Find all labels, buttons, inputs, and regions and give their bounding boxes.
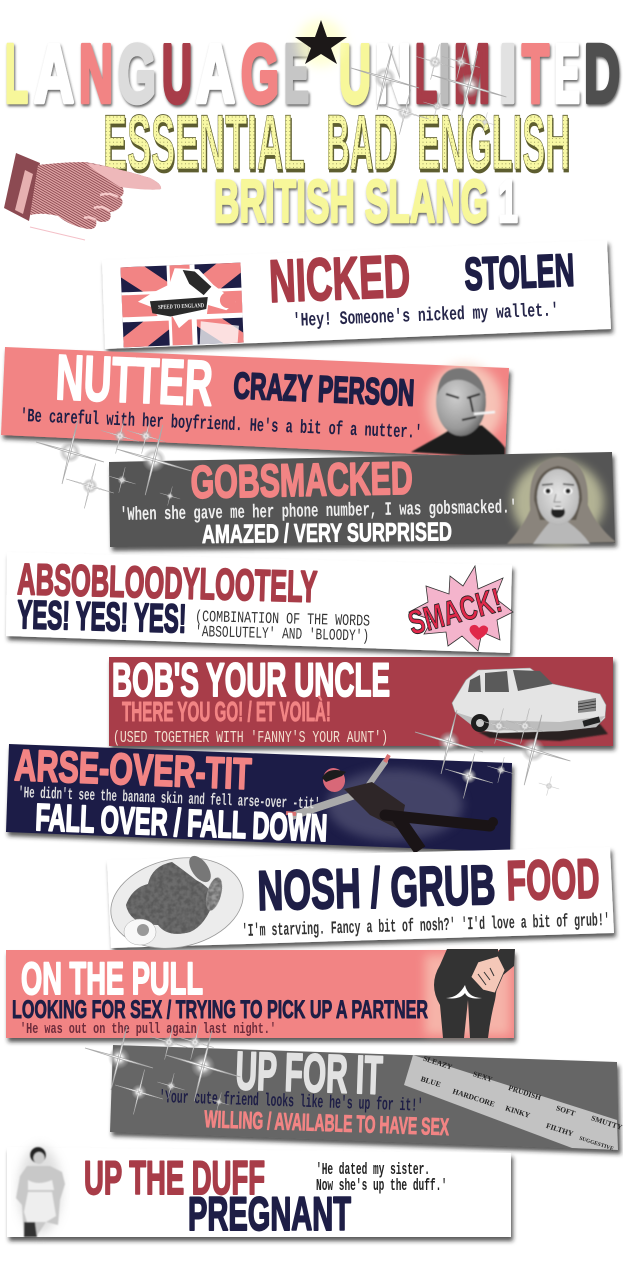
ruler strip of words [404, 1054, 623, 1153]
title: N [79, 27, 113, 120]
meaning: willing: WILLING / AVAILABLE TO HAVE SEX [204, 1106, 450, 1141]
panel: absobloodylootely [6, 552, 513, 653]
meaning: crazy person: CRAZY PERSON [233, 365, 415, 414]
subtitle: essential bad english: ESSENTIAL [103, 98, 305, 186]
title: M [454, 27, 490, 120]
title: E [284, 27, 309, 120]
ruler strip of words: SUGGESTIVE [578, 1136, 615, 1153]
title: T [522, 27, 549, 120]
title: A [196, 27, 235, 120]
sparkles: gobsmacked [36, 418, 191, 508]
title: I [439, 27, 450, 120]
panel: arse-over-tit [6, 741, 512, 852]
heading: arse-over-tit: ARSE-OVER-TIT [14, 741, 252, 799]
ruler strip of words: SOFT [555, 1103, 576, 1118]
title: G [118, 27, 156, 120]
title: G [241, 27, 279, 120]
icon: union flag: SPEED TO ENGLAND [158, 303, 205, 311]
meaning: there you go: THERE YOU GO! / ET VOILÀ! [122, 696, 331, 727]
icon: smack burst: SMACK! [404, 581, 506, 643]
title: E [554, 27, 580, 120]
sparkles: title [351, 44, 506, 134]
meaning: yes yes yes: YES! YES! YES! [17, 593, 187, 641]
ruler strip of words: PRUDISH [507, 1083, 542, 1102]
panel: nutter [1, 341, 509, 458]
photo: falling man [286, 755, 498, 850]
photo: reliant car [452, 668, 608, 741]
icon: union flag [121, 263, 244, 347]
photo: surprised woman [507, 457, 616, 544]
title [5, 27, 620, 120]
ruler strip of words: BLUE [420, 1074, 442, 1089]
note: (USED TOGETHER WITH 'FANNY'S YOUR AUNT') [113, 729, 388, 748]
panel: nosh [102, 846, 614, 960]
heading: nosh / grub: NOSH / GRUB [257, 853, 496, 922]
example sentence: 'He didn't see the banana skin and fell arse-over -tit' [18, 784, 320, 814]
meaning: pregnant: PREGNANT [188, 1187, 351, 1240]
heading: nicked: NICKED [268, 242, 411, 315]
example line two: Now she's up the duff.' [316, 1177, 447, 1196]
example line one: 'He dated my sister. [316, 1161, 430, 1180]
heading: on the pull: ON THE PULL [21, 953, 203, 1004]
icon: pointing hand [4, 153, 161, 240]
heading: up the duff: UP THE DUFF [84, 1151, 265, 1204]
title: A [34, 27, 74, 120]
icon: silhouette with hand [425, 949, 515, 1038]
example sentence: 'He was out on the pull again last night.' [20, 1021, 276, 1038]
meaning: fall over: FALL OVER / FALL DOWN [35, 797, 328, 850]
sparkles: car [415, 708, 570, 798]
ruler strip of words: SEXY [472, 1069, 494, 1084]
icon: black star [295, 19, 347, 67]
ruler strip of words: FILTHY [545, 1121, 575, 1138]
meaning: amazed: AMAZED / VERY SURPRISED [202, 516, 452, 549]
subtitle: british slang 1: 1 [498, 168, 518, 235]
photo: plate of food [102, 846, 252, 960]
panel: up for it [110, 1041, 623, 1153]
heading: gobsmacked: GOBSMACKED [190, 452, 413, 508]
photo: man smoking [411, 363, 505, 458]
title: U [162, 27, 192, 120]
title: N [375, 27, 411, 120]
ruler strip of words: KINKY [504, 1103, 532, 1120]
title: L [415, 27, 437, 120]
ruler strip of words: HARDCORE [452, 1087, 496, 1109]
panel: nicked [102, 240, 611, 349]
heading: nutter: NUTTER [54, 341, 214, 420]
subtitle: essential bad english: BAD [326, 98, 397, 186]
title: L [5, 27, 28, 120]
heading: absobloodylootely: ABSOBLOODYLOOTELY [17, 555, 318, 612]
panel: bob's your uncle [109, 653, 613, 748]
panel: up the duff [7, 1146, 511, 1240]
title: U [339, 27, 371, 120]
ruler strip of words: SMUTTY [590, 1113, 623, 1132]
heading: bob's your uncle: BOB'S YOUR UNCLE [112, 653, 390, 706]
photo: woman in corset [16, 1146, 65, 1237]
icon: smack burst [404, 566, 513, 651]
ruler strip of words: SLEAZY [422, 1054, 454, 1072]
note line one: (COMBINATION OF THE WORDS [195, 608, 370, 631]
note line two: 'ABSOLUTELY' AND 'BLOODY') [195, 623, 369, 646]
panel: gobsmacked [109, 452, 616, 549]
sparkles: up for it [85, 1024, 240, 1114]
heading: up for it: UP FOR IT [235, 1041, 384, 1106]
panel: on the pull [6, 949, 515, 1038]
title: I [499, 27, 517, 120]
